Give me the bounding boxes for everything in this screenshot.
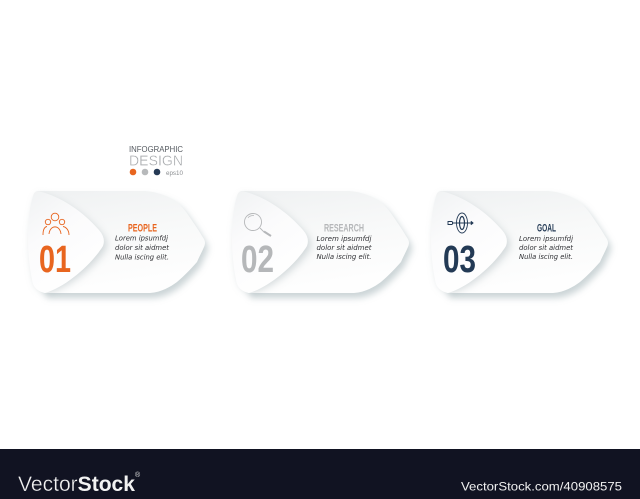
inner petal (28, 191, 104, 293)
brand block: infographic design (129, 145, 183, 177)
icon: target with arrow (448, 213, 474, 233)
icon: magnifier (244, 214, 271, 236)
grey dot (142, 169, 148, 175)
panel: goal (431, 191, 611, 298)
inner shadow (434, 195, 510, 293)
brand line: infographic: INFOGRAPHIC (129, 145, 183, 154)
body text: dolor sit aidmet (316, 244, 372, 252)
body text: Nulla iscing elit. (115, 254, 169, 262)
body text: Lorem ipsumfdj (115, 234, 168, 242)
body text: dolor sit aidmet (115, 244, 169, 252)
heading: research: RESEARCH (324, 222, 364, 234)
inner shadow (235, 195, 311, 293)
number 01: 01 (39, 239, 71, 281)
body text: Lorem ipsumfdj (519, 235, 573, 243)
body text: dolor sit aidmet (519, 244, 573, 252)
footer logo: VectorStock (18, 472, 135, 496)
footer bar (0, 449, 640, 499)
body text: Nulla iscing elit. (316, 253, 372, 261)
orange dot (130, 169, 136, 175)
number 02: 02 (241, 239, 274, 281)
footer url: VectorStock.com/40908575 (461, 480, 622, 494)
inner petal (431, 191, 507, 293)
eps label: eps10 (166, 170, 183, 177)
footer background (0, 449, 640, 499)
body text: Lorem ipsumfdj (316, 235, 372, 243)
panel: people (28, 191, 208, 298)
inner petal (232, 191, 308, 293)
icon: people (43, 213, 69, 235)
navy dot (154, 169, 160, 175)
body text: Nulla iscing elit. (519, 253, 573, 261)
card shadow (439, 196, 611, 298)
panel: research (232, 191, 412, 298)
registered mark: ® (135, 471, 141, 479)
outer arrow shape (237, 191, 409, 293)
inner shadow (31, 195, 107, 293)
brand line: design: DESIGN (129, 154, 183, 170)
outer arrow shape (436, 191, 608, 293)
number 03: 03 (443, 239, 476, 281)
heading: people: PEOPLE (128, 222, 157, 234)
outer arrow shape (33, 191, 205, 293)
card shadow (36, 196, 208, 298)
heading: goal: GOAL (537, 222, 556, 234)
card shadow (240, 196, 412, 298)
